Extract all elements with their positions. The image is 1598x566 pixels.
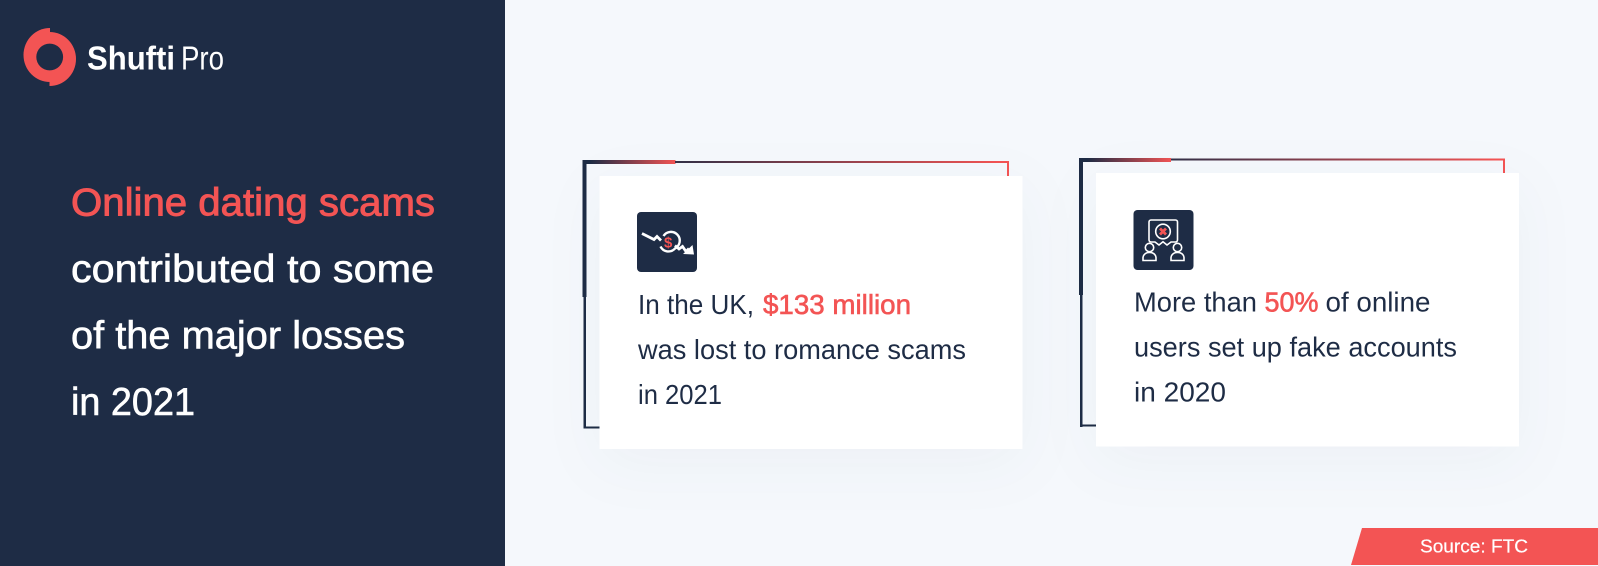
card text: 50% [1264,286,1318,318]
icon: falling money chart: $ [664,234,673,252]
panel: left navy sidebar [0,0,505,566]
card background [1096,173,1519,446]
source tag: Source: FTC [1420,536,1528,556]
heading: Online dating scams [71,182,435,224]
card text: $133 million [763,289,911,320]
heading: in 2021 [71,381,195,424]
card text: users set up fake accounts [1134,332,1457,362]
logo: Shufti Pro [24,28,224,86]
card text: in 2020 [1134,376,1226,408]
source tag [1351,528,1598,565]
panel: card fake accounts [1079,158,1519,446]
icon: logo ring [24,28,76,86]
logo wordmark: Shufti [87,40,175,76]
heading [71,182,435,424]
card text [637,289,966,410]
panel: card UK romance scams [582,160,1022,449]
card frame [582,160,1009,428]
card background [600,176,1022,449]
card text: In the UK, [638,289,754,320]
icon: falling money chart [637,212,697,272]
card text: More than [1134,286,1257,318]
heading: contributed to some [71,248,434,291]
card text [1134,286,1457,408]
card text: of online [1326,286,1430,318]
card frame [1079,158,1505,427]
logo wordmark: Pro [181,40,224,76]
card text: was lost to romance scams [637,334,966,365]
card text: in 2021 [638,379,722,410]
heading: of the major losses [71,314,405,358]
icon: fake account chat [1134,210,1194,270]
